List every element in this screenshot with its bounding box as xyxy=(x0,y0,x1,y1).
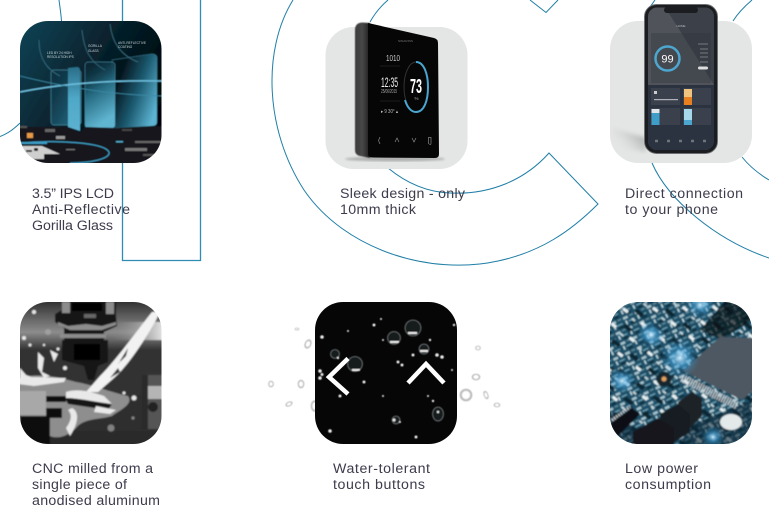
caption: LCD xyxy=(32,186,130,234)
glass panel: gorilla xyxy=(85,62,115,128)
caption: CNC: CNC milled from a xyxy=(32,461,153,477)
date: 25/06/2015 xyxy=(381,89,397,95)
silver capacitor xyxy=(720,414,742,430)
phone body xyxy=(644,4,718,154)
caption: LCD: 3.5” IPS LCD xyxy=(32,186,114,202)
dark lower band xyxy=(608,400,752,446)
caption: CNC: anodised aluminum xyxy=(32,493,160,509)
panel labels: ANTI-REFLECTIVE xyxy=(118,41,146,45)
device base xyxy=(18,126,164,165)
status readouts xyxy=(698,44,708,62)
caption: LCD: Anti-Reflective xyxy=(32,202,130,218)
ring gauge xyxy=(404,62,428,112)
card: water droplets xyxy=(268,302,500,444)
touch icons xyxy=(378,137,431,144)
black IC lower left xyxy=(608,408,640,436)
glass panel: IPS xyxy=(51,70,81,125)
caption: phone: to your phone xyxy=(625,202,718,218)
caption: power: Low power xyxy=(625,461,698,477)
gauge value: 99 xyxy=(661,54,674,66)
glows xyxy=(610,302,723,444)
ring gauge xyxy=(656,46,680,70)
card background xyxy=(610,21,752,163)
panel labels: RESOLUTION IPS xyxy=(47,55,74,59)
home title: HOME xyxy=(676,24,686,28)
caption: sleek design: Sleek design - only xyxy=(340,186,466,202)
bottom navigation xyxy=(655,140,706,142)
glass panel: anti-reflective xyxy=(112,54,157,128)
coolant jet xyxy=(86,312,160,392)
main chip xyxy=(683,337,754,400)
caption: phone xyxy=(625,186,743,218)
temperature row: ▸ 9 30° ▴ xyxy=(381,109,398,115)
droplets inside card xyxy=(318,318,455,438)
separators xyxy=(380,66,400,101)
notch xyxy=(664,7,698,13)
card: circuit board xyxy=(610,302,752,444)
callout arcs xyxy=(39,24,138,76)
bright panel xyxy=(68,67,80,131)
phone screen xyxy=(648,7,714,150)
tile 4 xyxy=(683,108,711,125)
device bezel xyxy=(355,22,370,158)
tile 2 xyxy=(683,88,711,105)
caption: water: touch buttons xyxy=(333,477,425,493)
heat sink blocks xyxy=(633,392,702,446)
tile 1 xyxy=(651,88,680,105)
card: thermostat device: 12:35 xyxy=(381,74,398,90)
background line art xyxy=(0,0,769,265)
panel labels: COATING xyxy=(118,45,133,49)
panel labels xyxy=(47,41,146,59)
caption: water xyxy=(333,461,430,493)
dark corner traces xyxy=(700,302,750,339)
top reading: 1010 xyxy=(386,54,400,63)
caption: water: Water-tolerant xyxy=(333,461,430,477)
caption: power xyxy=(625,461,711,493)
toggle xyxy=(698,66,708,70)
caption: phone: Direct connection xyxy=(625,186,743,202)
caption: CNC: single piece of xyxy=(32,477,127,493)
card background xyxy=(326,27,468,169)
tile 3 xyxy=(651,108,680,125)
outline: large C xyxy=(272,0,598,265)
card: phone app xyxy=(610,4,752,163)
device face xyxy=(368,23,439,158)
wet work surface xyxy=(18,375,129,437)
gauge value: 73 xyxy=(410,76,422,98)
caption: CNC xyxy=(32,461,160,509)
outline: right C xyxy=(650,0,769,258)
brand: SINARINS xyxy=(398,39,413,43)
caption: LCD: Gorilla Glass xyxy=(32,218,113,234)
splash xyxy=(18,310,136,436)
chuck right xyxy=(147,374,162,430)
chevron up button xyxy=(408,364,444,383)
card: thermostat device xyxy=(326,22,468,169)
panel labels: GORILLA xyxy=(88,44,103,48)
caption: power: consumption xyxy=(625,477,711,493)
outline: left arcs xyxy=(0,0,62,136)
sweep lines xyxy=(20,81,162,92)
panel labels: LED BY 24 HIGH xyxy=(47,51,72,55)
gauge unit: % xyxy=(414,96,419,101)
spindle xyxy=(55,302,117,380)
panel labels: GLASS xyxy=(88,49,99,53)
chip pins xyxy=(682,378,738,406)
workpiece left xyxy=(18,391,46,415)
caption: sleek design: 10mm thick xyxy=(340,202,417,218)
droplets outside card xyxy=(268,328,500,412)
card: LCD layers xyxy=(18,19,164,165)
phone shadow xyxy=(619,132,647,152)
caption: sleek design xyxy=(340,186,466,218)
outline: open rectangle xyxy=(122,0,200,260)
device shadow xyxy=(345,156,445,162)
card background xyxy=(315,302,457,444)
capacitor pad xyxy=(656,372,672,386)
card: CNC milling xyxy=(18,300,164,446)
chevron left button xyxy=(329,358,348,394)
